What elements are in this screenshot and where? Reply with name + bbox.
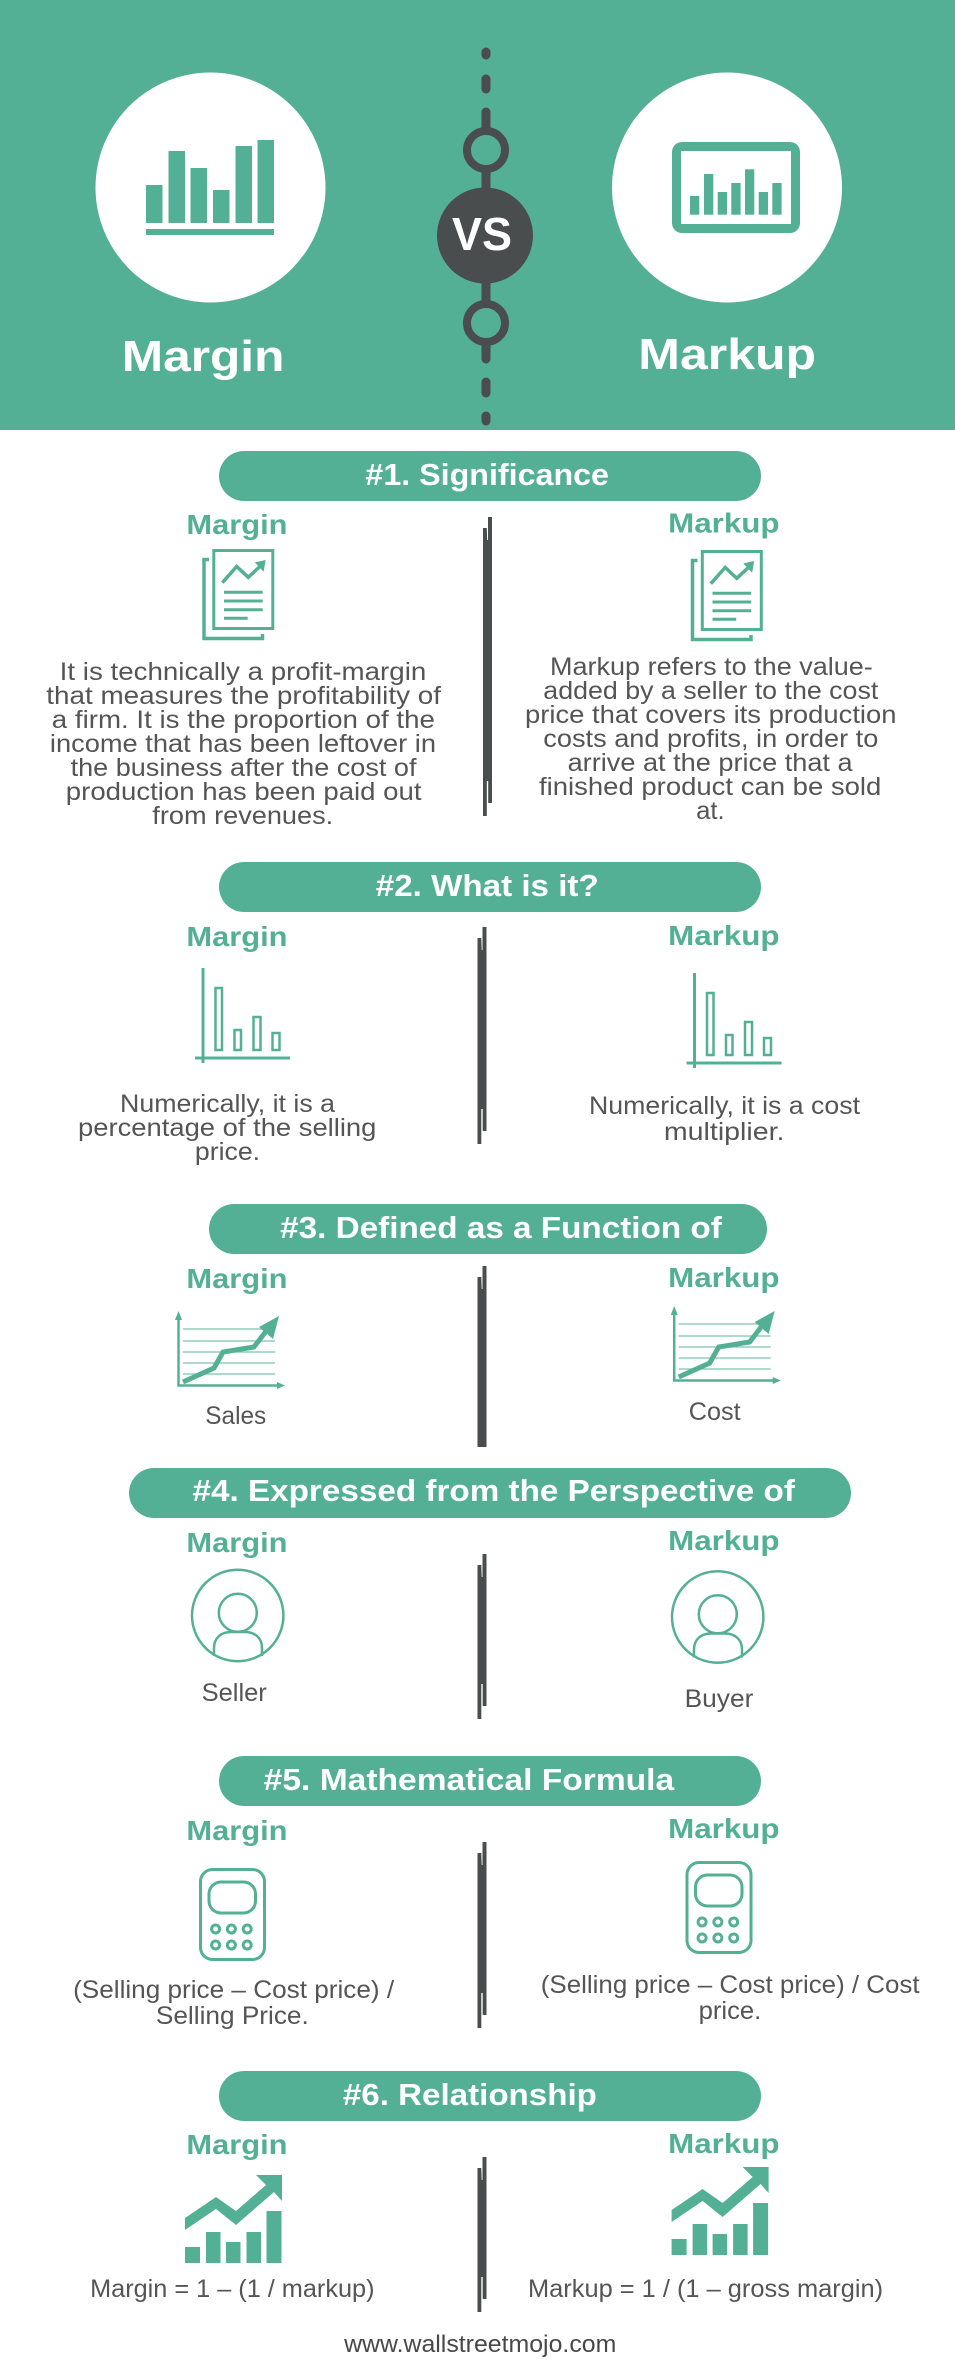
icon: markup document — [692, 552, 761, 640]
heading: relationship — [219, 2071, 761, 2121]
icon: markup circle with monitor chart — [612, 72, 842, 302]
panel: section 5 formula — [73, 1756, 920, 2030]
text: markup significance: at. — [696, 797, 725, 825]
label: margin: Margin — [186, 1263, 288, 1294]
text: markup formula: price. — [699, 1997, 761, 2025]
icon: margin calculator — [200, 1870, 264, 1960]
text: margin what is it — [78, 1090, 376, 1166]
panel: section 6 relationship — [90, 2071, 883, 2312]
icon: markup bar chart — [686, 973, 782, 1068]
heading: significance — [219, 451, 761, 501]
icon: margin bar chart — [195, 968, 290, 1063]
icon: markup calculator — [687, 1862, 751, 1952]
text: markup formula — [541, 1971, 920, 2025]
label: margin: Margin — [186, 2129, 288, 2160]
divider — [478, 2157, 486, 2312]
text: margin significance — [46, 658, 441, 830]
icon: vs connector line — [467, 52, 505, 421]
text: margin significance: production has been paid out — [66, 778, 422, 806]
icon: vs badge: VS — [452, 208, 512, 260]
text: markup relationship: Markup = 1 / (1 – gross margin) — [528, 2275, 883, 2303]
icon: seller person — [192, 1570, 283, 1661]
text: margin relationship: Margin = 1 – (1 / markup) — [90, 2275, 374, 2303]
text: sales: Sales — [205, 1402, 266, 1430]
heading: defined as a function of: #3. Defined as a Function of — [280, 1210, 723, 1245]
text: margin significance: It is technically a profit-margin — [60, 658, 426, 686]
text: seller: Seller — [202, 1679, 267, 1707]
panel: section 3 function — [175, 1204, 781, 1447]
label: margin: Margin — [186, 509, 288, 540]
label: markup: Markup — [668, 920, 780, 951]
panel: section 2 what is it — [78, 862, 860, 1166]
text: markup what is it: Numerically, it is a cost — [589, 1092, 860, 1120]
text: margin formula — [73, 1976, 394, 2030]
icon: markup growth chart — [672, 2167, 769, 2255]
text: markup formula: (Selling price – Cost price) / Cost — [541, 1971, 920, 1999]
label: markup: Markup — [668, 508, 780, 538]
text: margin significance: income that has been leftover in — [50, 730, 436, 758]
label: markup: Markup — [668, 1813, 780, 1844]
panel: section 1 significance — [46, 451, 897, 830]
text: margin formula: Selling Price. — [156, 2002, 309, 2030]
text: margin what is it: Numerically, it is a — [120, 1090, 335, 1118]
label: margin: Margin — [186, 921, 288, 952]
divider — [483, 517, 492, 816]
icon: margin circle with bar chart — [96, 72, 326, 302]
label: margin: Margin — [186, 1815, 288, 1846]
text: markup significance: costs and profits, in order to — [543, 725, 878, 753]
divider — [478, 1842, 486, 2028]
label: markup: Markup — [668, 2128, 780, 2159]
text: cost: Cost — [689, 1398, 741, 1426]
heading: mathematical formula: #5. Mathematical Formula — [264, 1762, 675, 1797]
icon: vs badge — [437, 188, 533, 284]
text: markup significance: Markup refers to the value- — [550, 653, 873, 681]
panel: header — [0, 0, 955, 430]
text: margin what is it: percentage of the selling — [78, 1114, 376, 1142]
divider — [478, 927, 486, 1144]
divider — [478, 1554, 486, 1719]
heading: defined as a function of — [209, 1204, 767, 1254]
text: margin what is it: price. — [195, 1138, 260, 1166]
text: margin significance: the business after the cost of — [71, 754, 417, 782]
heading: expressed from the perspective of: #4. Expressed from the Perspective of — [192, 1473, 796, 1508]
heading: margin: Margin — [122, 332, 284, 381]
heading: what is it: #2. What is it? — [376, 868, 599, 903]
text: markup significance: finished product can be sold — [539, 773, 881, 801]
panel: section 4 perspective — [129, 1468, 851, 1719]
heading: expressed from the perspective of — [129, 1468, 851, 1518]
heading: markup: Markup — [638, 330, 816, 379]
text: markup significance: added by a seller to the cost — [543, 677, 878, 705]
label: markup: Markup — [668, 1262, 780, 1293]
icon: buyer person — [672, 1571, 763, 1663]
text: markup what is it: multiplier. — [664, 1118, 784, 1146]
text: markup significance: arrive at the price that a — [568, 749, 853, 777]
icon: margin line chart — [175, 1311, 285, 1389]
icon: margin growth chart — [185, 2175, 282, 2263]
heading: what is it — [219, 862, 761, 912]
heading: mathematical formula — [219, 1756, 761, 1806]
icon: markup line chart — [671, 1306, 781, 1384]
heading: relationship: #6. Relationship — [343, 2077, 597, 2112]
label: markup: Markup — [668, 1525, 780, 1556]
heading: significance: #1. Significance — [365, 457, 609, 492]
text: margin formula: (Selling price – Cost price) / — [73, 1976, 394, 2004]
text: margin significance: a firm. It is the proportion of the — [52, 706, 435, 734]
icon: margin document — [204, 550, 273, 638]
text: margin significance: from revenues. — [152, 802, 333, 830]
text: buyer: Buyer — [685, 1685, 753, 1713]
label: margin: Margin — [186, 1527, 288, 1558]
text: markup significance: price that covers its production — [525, 701, 896, 729]
text: margin significance: that measures the profitability of — [46, 682, 441, 710]
divider — [478, 1266, 486, 1447]
text: markup what is it — [589, 1092, 860, 1146]
text: markup significance — [525, 653, 896, 825]
footer: website: www.wallstreetmojo.com — [343, 2331, 616, 2358]
